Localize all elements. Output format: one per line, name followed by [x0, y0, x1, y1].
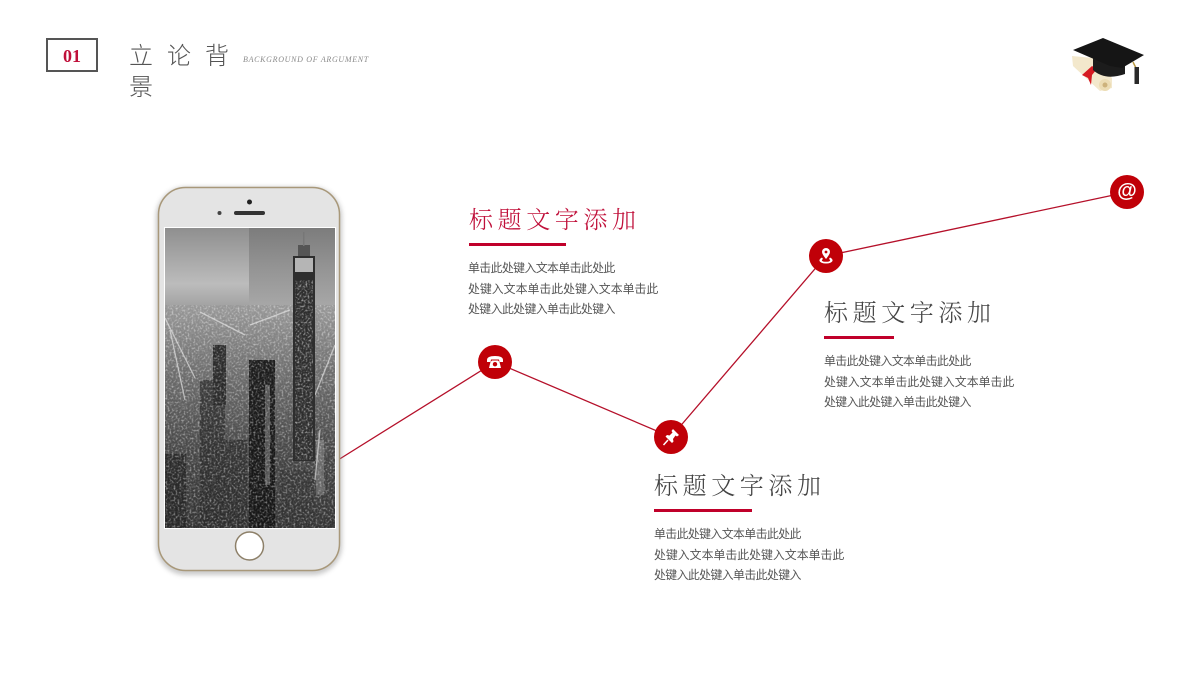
- body 2: 处键入文本单击此处键入文本单击此: [654, 548, 844, 562]
- heading 2: 标题文字添加: [654, 474, 826, 500]
- english subtitle: BACKGROUND OF ARGUMENT: [243, 55, 369, 64]
- main title: 立论背景: [129, 43, 243, 101]
- body 3: 单击此处键入文本单击此处此: [824, 354, 971, 368]
- body 3: [824, 354, 1014, 409]
- tall tower: [293, 256, 315, 461]
- icon: graduation cap: [1072, 38, 1144, 91]
- body 1: 处键入此处键入单击此处键入: [468, 302, 615, 316]
- text block 1: [468, 208, 658, 316]
- underline 3: [824, 336, 894, 339]
- node: location marker: [809, 239, 843, 273]
- node: pushpin: [654, 420, 688, 454]
- number badge: 01: [63, 46, 81, 66]
- body 2: 处键入此处键入单击此处键入: [654, 568, 801, 582]
- node: at sign: [1110, 175, 1144, 209]
- body 1: 单击此处键入文本单击此处此: [468, 261, 615, 275]
- body 2: 单击此处键入文本单击此处此: [654, 527, 801, 541]
- phone body: [158, 188, 340, 570]
- phone screen photo: city skyline: [164, 227, 336, 529]
- node: telephone: [478, 345, 512, 379]
- body 1: 处键入文本单击此处键入文本单击此: [468, 282, 658, 296]
- phone camera and speaker: [218, 200, 265, 215]
- heading 3: 标题文字添加: [824, 301, 996, 327]
- underline 1: [469, 243, 566, 246]
- underline 2: [654, 509, 752, 512]
- body 1: [468, 261, 658, 316]
- number badge: [46, 38, 98, 72]
- phone home button: [236, 532, 264, 560]
- heading 1: 标题文字添加: [469, 208, 641, 234]
- text block 3: [824, 300, 1014, 409]
- phone mockup: [154, 184, 344, 578]
- node: at sign: @: [1117, 180, 1137, 202]
- text block 2: [654, 474, 844, 582]
- body 2: [654, 527, 844, 582]
- body 3: 处键入此处键入单击此处键入: [824, 395, 971, 409]
- body 3: 处键入文本单击此处键入文本单击此: [824, 374, 1014, 388]
